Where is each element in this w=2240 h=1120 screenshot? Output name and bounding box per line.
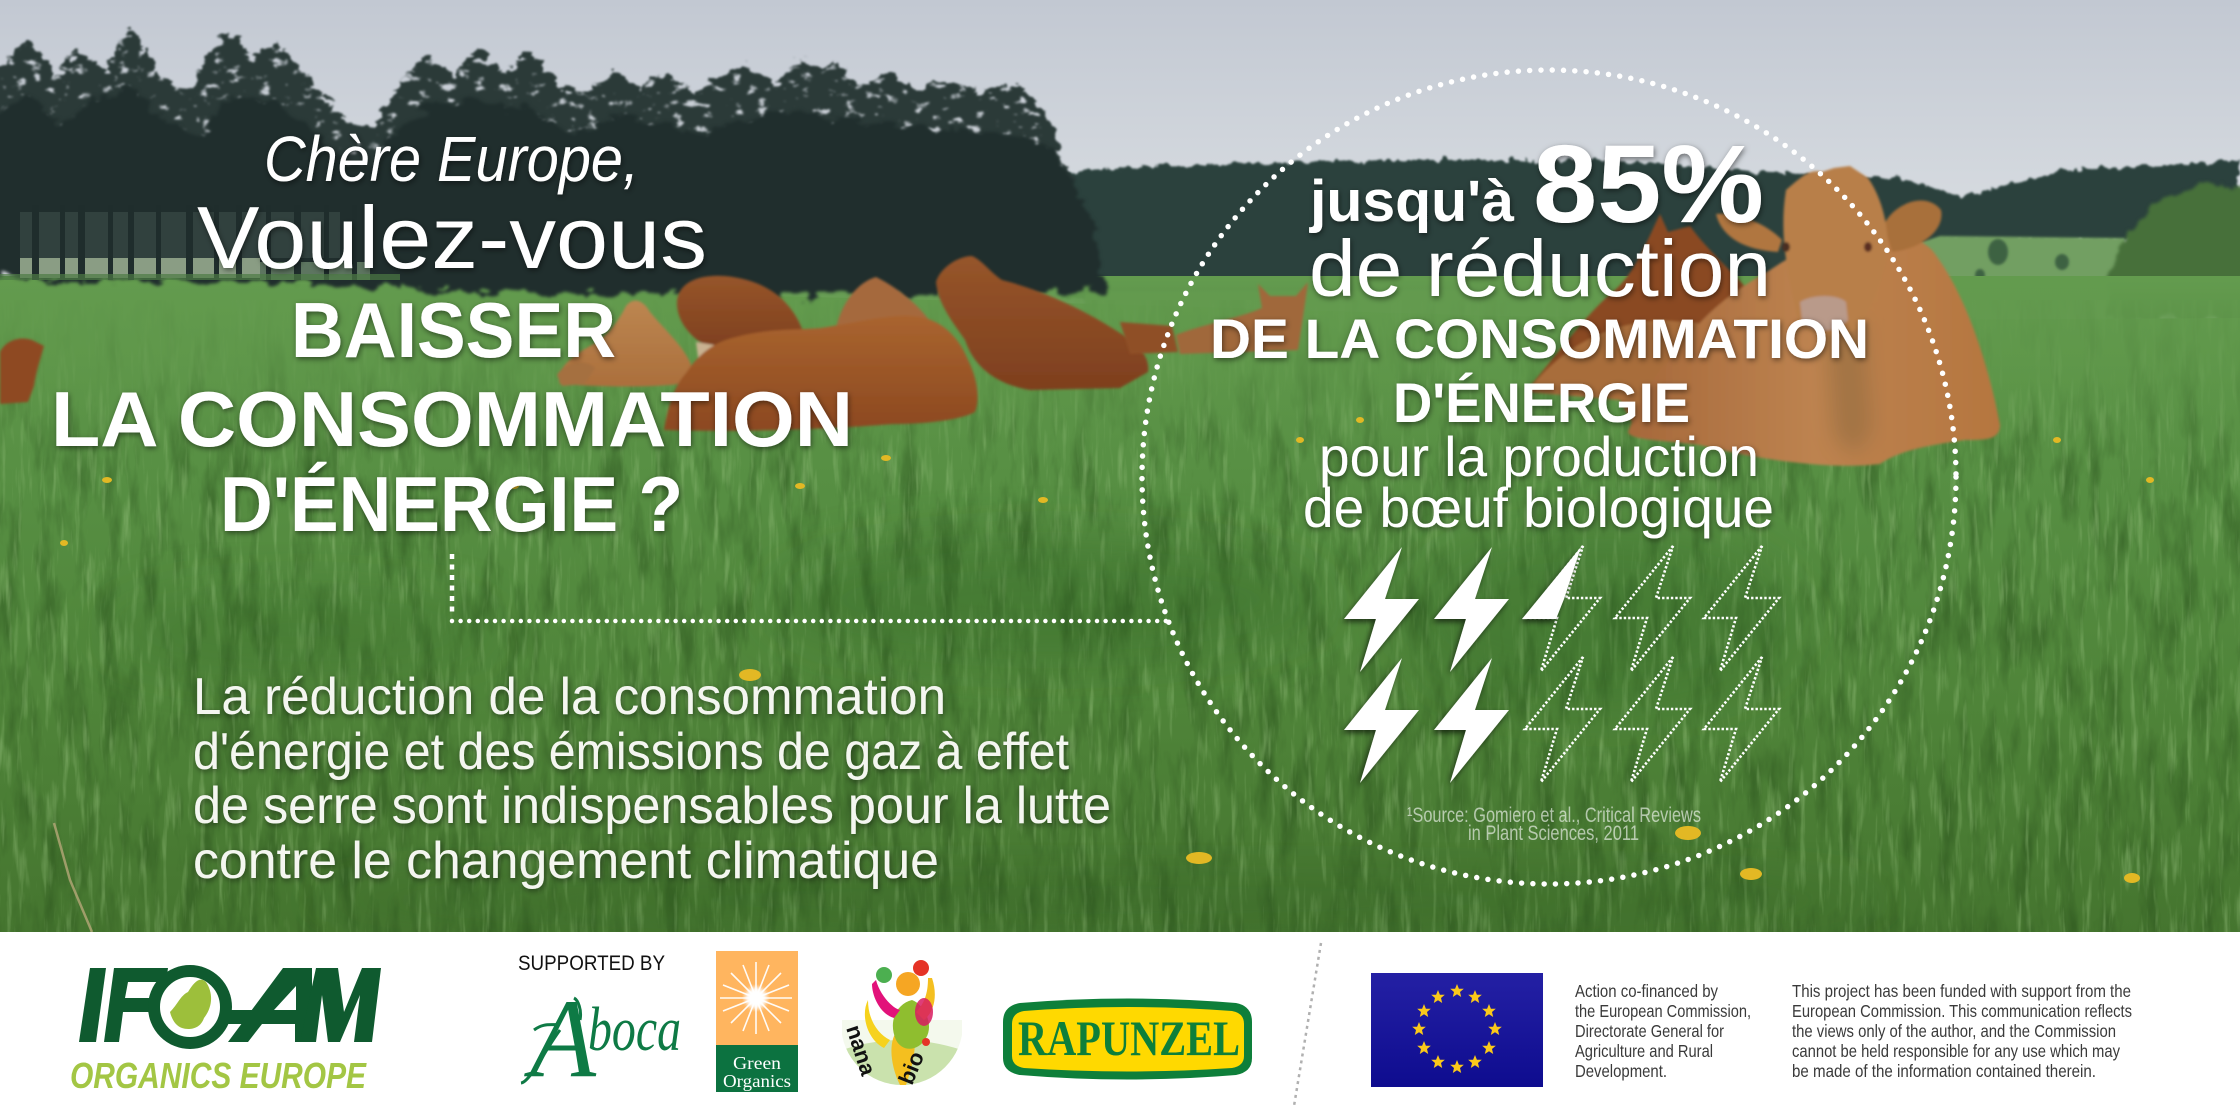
text block: co-financing: the European Commission, [1575, 1001, 1751, 1021]
cow herd on the left [0, 256, 1148, 431]
line: d'énergie: D'ÉNERGIE ? [220, 460, 683, 548]
text block: disclaimer: cannot be held responsible for any use which may [1792, 1041, 2120, 1061]
light gaps between trunks [20, 212, 340, 258]
europe map in globe [170, 980, 211, 1029]
ears [1716, 214, 1782, 252]
source note: in Plant Sciences, 2011 [1468, 822, 1639, 845]
line: baisser: BAISSER [291, 286, 616, 374]
logo: Rapunzel [1003, 998, 1252, 1080]
heading: question on the left [51, 123, 853, 548]
icons: outlined lightning bolts [1525, 546, 1779, 782]
grass texture [0, 276, 2240, 932]
source note: ¹Source: Gomiero et al., Critical Reviews [1407, 804, 1701, 827]
logo: IFOAM Organics Europe [70, 968, 381, 1096]
small pasture trees [1975, 239, 2069, 281]
cow facing camera behind [936, 256, 1148, 390]
text block: co-financing: Directorate General for [1575, 1021, 1724, 1041]
text block: co-financing: Development. [1575, 1061, 1667, 1081]
head [1783, 166, 1888, 335]
supported by label: SUPPORTED BY [518, 952, 665, 975]
source note [1407, 804, 1701, 845]
cow head facing away [836, 276, 928, 326]
text block: disclaimer: the views only of the author, and the Commission [1792, 1021, 2116, 1041]
tan cow lying [559, 301, 692, 387]
tree canopy [0, 26, 1072, 174]
EU flag [1371, 973, 1543, 1087]
chest shadow [1826, 320, 1872, 456]
logo: Green Organics: Organics [723, 1071, 791, 1091]
small cow left in circle [1176, 282, 1308, 354]
cow rump at circle edge [1120, 322, 1178, 354]
text block: co-financing [1575, 981, 1751, 1081]
logo: Green Organics: Green [733, 1053, 781, 1073]
stars [1412, 984, 1502, 1073]
treeline [0, 30, 1105, 296]
big cow body [1628, 233, 2000, 466]
juggler figure [891, 1026, 915, 1085]
figure: 85%: 85% [1533, 123, 1764, 246]
d'énergie: D'ÉNERGIE [1393, 371, 1690, 434]
logo: nana bio [841, 960, 962, 1092]
text block: co-financing: Action co-financed by [1575, 981, 1718, 1001]
text block: disclaimer [1792, 981, 2132, 1081]
text block: explanation: La réduction de la consommation [193, 668, 946, 726]
callout: 85% reduction [1210, 123, 1869, 539]
text block: explanation: contre le changement climatique [193, 832, 939, 890]
text block: disclaimer: be made of the information contained therein. [1792, 1061, 2096, 1081]
cow far left [0, 338, 44, 404]
logo: Green Organics [716, 951, 798, 1092]
muzzle [1800, 296, 1848, 330]
dense lower trees [0, 84, 1105, 296]
wordmark Organics Europe: ORGANICS EUROPE [70, 1055, 367, 1096]
logo: Aboca: boca [588, 996, 681, 1064]
bush on the right [2105, 183, 2240, 322]
de réduction: de réduction [1309, 224, 1771, 313]
distant forest [1060, 160, 2240, 298]
sky [0, 0, 2240, 276]
text block: disclaimer: European Commission. This communication reflects [1792, 1001, 2132, 1021]
field background [0, 276, 2240, 932]
text block: explanation: de serre sont indispensables pour la lutte [193, 777, 1111, 835]
connector: dotted line to circle [452, 554, 1168, 621]
footer band [0, 932, 2240, 1120]
dry grass stem [54, 823, 92, 932]
wordmark IFOAM [79, 968, 381, 1043]
cow behind, dark head [1527, 214, 1770, 420]
text block: disclaimer: This project has been funded with support from the [1792, 981, 2131, 1001]
line: voulez-vous: Voulez-vous [197, 188, 707, 287]
logo: Aboca: A [523, 977, 597, 1101]
de la consommation: DE LA CONSOMMATION [1210, 307, 1869, 370]
logo: Rapunzel: RAPUNZEL [1018, 1010, 1240, 1066]
cows on the right [1120, 166, 2000, 466]
greeting: Chère Europe, [264, 123, 639, 195]
logo: Aboca [521, 977, 681, 1101]
text block: explanation: d'énergie et des émissions de gaz à effet [193, 723, 1070, 781]
text block: explanation [193, 668, 1111, 890]
jusqu'à: jusqu'à [1309, 169, 1515, 234]
dandelions [60, 417, 2154, 883]
sun icon [720, 962, 792, 1034]
text block: co-financing: Agriculture and Rural [1575, 1041, 1713, 1061]
bio: bio [893, 1048, 929, 1088]
line: la consommation: LA CONSOMMATION [51, 375, 853, 463]
dotted circle [1142, 70, 1956, 884]
pour la production: pour la production [1319, 425, 1759, 488]
cow standing head down [677, 276, 808, 350]
big cow lying in foreground [664, 316, 978, 431]
nana: nana [841, 1022, 881, 1079]
icons: filled lightning bolts [1344, 547, 1581, 783]
de boeuf biologique: de bœuf biologique [1303, 476, 1774, 539]
distant pastures [1085, 236, 2130, 325]
